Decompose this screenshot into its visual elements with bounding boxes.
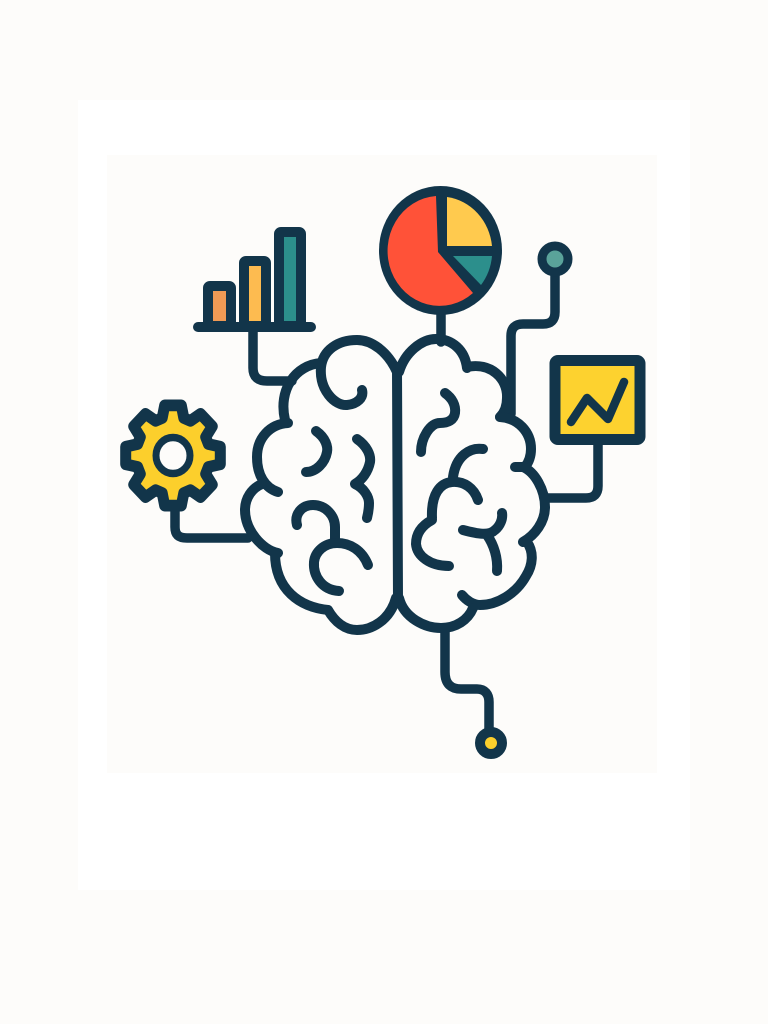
right hemisphere folds (416, 393, 502, 571)
bar 2 (244, 261, 266, 326)
icon: pie chart (379, 186, 502, 315)
teal slice (453, 256, 492, 285)
icon: line chart card (555, 360, 640, 440)
left hemisphere folds (296, 431, 370, 591)
red slice (388, 196, 473, 306)
connector lines (175, 272, 598, 730)
icon: teal node (542, 246, 568, 272)
gear hole (156, 437, 190, 474)
icon: yellow node (480, 732, 502, 754)
yellow slice (447, 197, 492, 246)
left hemisphere outline (245, 340, 397, 630)
bar 3 (279, 232, 301, 326)
right hemisphere outline (399, 339, 545, 628)
shelf (193, 322, 316, 332)
icon: gear (126, 405, 220, 506)
bar 1 (208, 286, 231, 326)
icon: bar chart (193, 232, 316, 332)
midline (397, 370, 398, 600)
trend line (571, 382, 624, 422)
brain (245, 339, 545, 630)
